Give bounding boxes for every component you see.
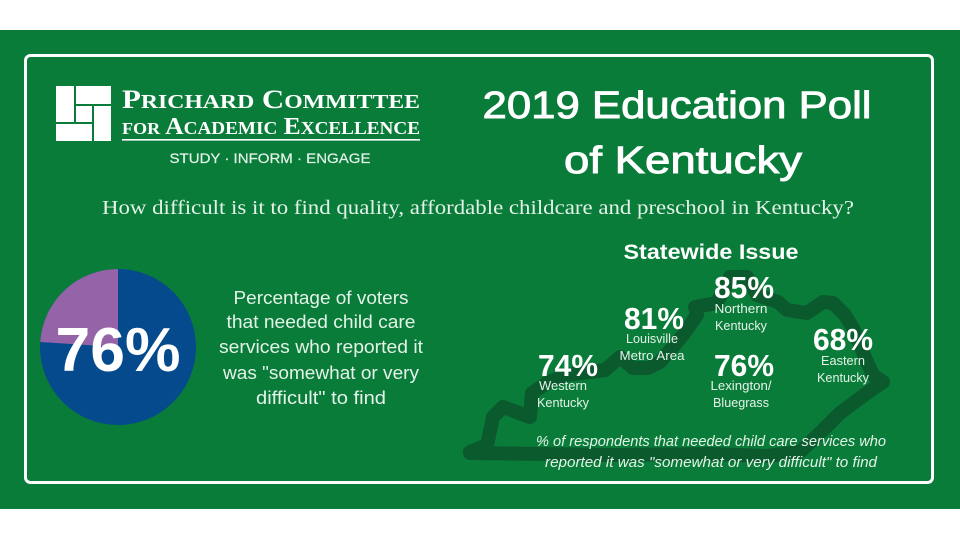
region: Louisville Metro Area: 81% <box>624 301 684 336</box>
region: Western Kentucky <box>537 348 598 410</box>
region: Western Kentucky: Western <box>539 379 587 393</box>
title: 2019 Education Poll <box>482 85 872 127</box>
logo: Prichard Committee <box>56 85 420 166</box>
logo wordmark line 2: FOR ACADEMIC EXCELLENCE <box>122 114 420 140</box>
map footnote <box>536 433 886 471</box>
region: Louisville Metro Area <box>620 301 685 363</box>
region: Eastern Kentucky: Kentucky <box>817 371 870 385</box>
pie chart: 76% <box>40 269 196 425</box>
region: Lexington/Bluegrass <box>710 348 774 410</box>
region: Eastern Kentucky: Eastern <box>821 354 865 368</box>
pie description: services who reported it <box>219 337 423 357</box>
logo wordmark line 1: PRICHARD COMMITTEE <box>122 85 420 114</box>
region: Western Kentucky: Kentucky <box>537 396 590 410</box>
map heading: Statewide Issue <box>624 241 798 264</box>
map footnote: % of respondents that needed child care services who <box>536 433 886 450</box>
title: of Kentucky <box>564 140 802 182</box>
region: Northern Kentucky: Northern <box>714 302 768 316</box>
region: Lexington/Bluegrass: Lexington/ <box>710 379 772 393</box>
logo tagline: STUDY · INFORM · ENGAGE <box>170 150 370 166</box>
region: Western Kentucky: 74% <box>538 348 598 383</box>
pie description: was "somewhat or very <box>222 363 419 383</box>
map footnote: reported it was "somewhat or very difficult" to find <box>545 454 878 471</box>
region: Eastern Kentucky: 68% <box>813 322 873 357</box>
icon: logo square <box>56 86 111 141</box>
region: Louisville Metro Area: Louisville <box>626 332 678 346</box>
pie description <box>219 288 423 408</box>
pie description: Percentage of voters <box>234 288 408 308</box>
survey question: How difficult is it to find quality, affordable childcare and preschool in Kentucky? <box>102 198 854 219</box>
region: Eastern Kentucky <box>813 322 873 385</box>
pie description: difficult" to find <box>256 388 386 408</box>
region: Northern Kentucky: Kentucky <box>715 319 768 333</box>
map: Kentucky outline <box>470 277 883 456</box>
pie value: 76% <box>56 316 180 385</box>
region: Lexington/Bluegrass: 76% <box>714 348 774 383</box>
region: Northern Kentucky: 85% <box>714 270 774 305</box>
title <box>482 85 872 182</box>
region: Northern Kentucky <box>714 270 774 333</box>
region: Lexington/Bluegrass: Bluegrass <box>713 396 769 410</box>
white rounded frame <box>26 56 932 482</box>
region: Louisville Metro Area: Metro Area <box>620 349 685 363</box>
pie description: that needed child care <box>226 312 416 332</box>
